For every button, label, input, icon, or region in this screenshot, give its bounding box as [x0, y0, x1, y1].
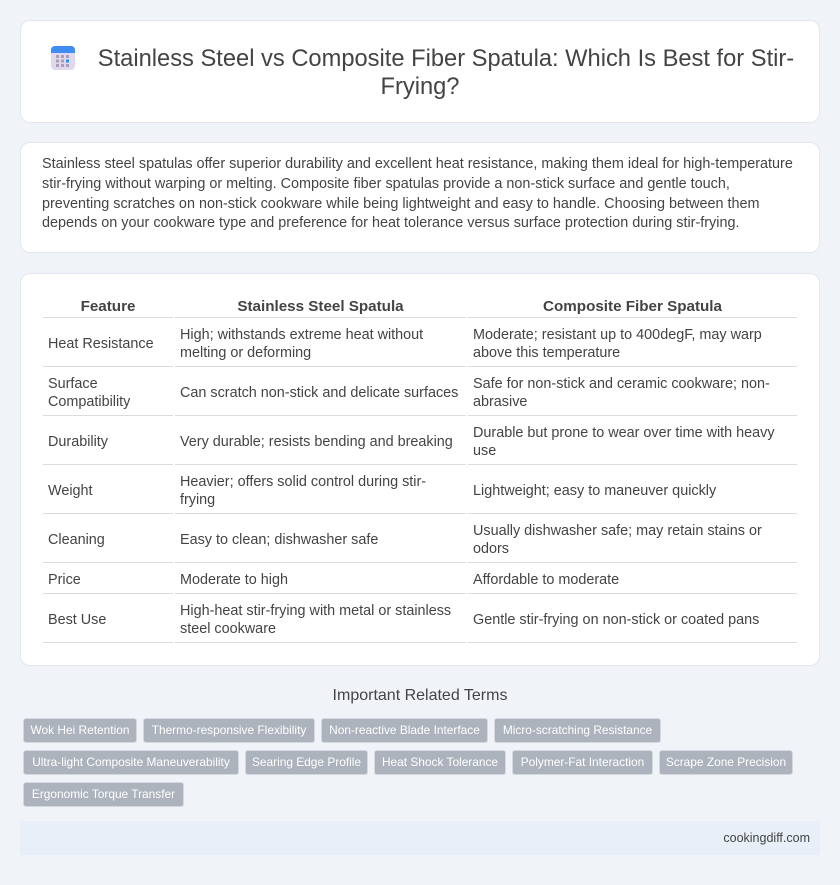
cell: High; withstands extreme heat without — [180, 327, 423, 343]
tag — [494, 718, 661, 743]
cell — [473, 327, 762, 361]
cell: Lightweight; easy to maneuver quickly — [473, 483, 716, 499]
tag — [143, 718, 315, 743]
footer bar — [20, 821, 820, 855]
cell: melting or deforming — [180, 345, 311, 361]
tag: Non-reactive Blade Interface — [329, 723, 480, 737]
text: intro: stir-frying without warping or melting. Composite fiber spatulas provide a non-stick surface and gentle touch, — [42, 176, 730, 192]
tag list — [23, 718, 793, 807]
cell: Gentle stir-frying on non-stick or coated pans — [473, 612, 759, 628]
cell: Moderate; resistant up to 400degF, may warp — [473, 327, 762, 343]
title — [98, 46, 794, 100]
tag: Ergonomic Torque Transfer — [32, 787, 175, 801]
cell — [180, 474, 426, 508]
tag — [23, 718, 137, 743]
cell: Usually dishwasher safe; may retain stains or — [473, 523, 762, 539]
table header: Stainless Steel Spatula: Stainless Steel Spatula — [237, 298, 404, 315]
row: Heat Resistance: Heat Resistance — [48, 336, 154, 352]
title: Stainless Steel vs Composite Fiber Spatula: Which Is Best for Stir- — [98, 46, 794, 72]
row: Surface Compatibility: Surface — [48, 376, 98, 392]
text: intro: Stainless steel spatulas offer superior durability and excellent heat resistance, making them ideal for high-temperature — [42, 156, 793, 172]
cell — [473, 425, 775, 459]
cell: High-heat stir-frying with metal or stainless — [180, 603, 451, 619]
tag: Scrape Zone Precision — [666, 755, 786, 769]
cell: Affordable to moderate — [473, 572, 619, 588]
panel: intro paragraph — [20, 142, 820, 253]
cell: Very durable; resists bending and breaking — [180, 434, 453, 450]
cell: above this temperature — [473, 345, 620, 361]
icon: calendar — [51, 46, 75, 70]
cell: steel cookware — [180, 621, 276, 637]
row: Cleaning: Cleaning — [48, 532, 105, 548]
text: intro: preventing scratches on non-stick cookware while being lightweight and easy to handle. Choosing between them — [42, 196, 760, 212]
cell — [473, 376, 770, 410]
tag — [659, 750, 793, 775]
cell: Durable but prone to wear over time with heavy — [473, 425, 775, 441]
heading: related terms: Important Related Terms — [333, 687, 507, 704]
cell: Can scratch non-stick and delicate surfaces — [180, 385, 458, 401]
cell: odors — [473, 541, 509, 557]
panel: title card — [20, 20, 820, 123]
cell — [180, 603, 451, 637]
tag: Ultra-light Composite Maneuverability — [32, 755, 230, 769]
panel: comparison table — [20, 273, 820, 666]
cell: use — [473, 443, 496, 459]
row: Durability: Durability — [48, 434, 108, 450]
table header: Composite Fiber Spatula: Composite Fiber Spatula — [543, 298, 722, 315]
tag: Thermo-responsive Flexibility — [152, 723, 306, 737]
tag: Heat Shock Tolerance — [382, 755, 498, 769]
text: intro — [42, 156, 793, 231]
text: intro: depends on your cookware type and preference for heat tolerance versus surface protection during stir-frying. — [42, 215, 740, 231]
cell — [180, 327, 424, 361]
tag: Polymer-Fat Interaction — [521, 755, 644, 769]
table header: Feature: Feature — [81, 298, 135, 315]
tag: Micro-scratching Resistance — [503, 723, 652, 737]
row: Surface Compatibility: Compatibility — [48, 394, 130, 410]
row: Surface Compatibility — [48, 376, 130, 410]
row: Price: Price — [48, 572, 81, 588]
tag — [321, 718, 488, 743]
tag: Searing Edge Profile — [252, 755, 361, 769]
tag — [374, 750, 506, 775]
cell: Heavier; offers solid control during stir- — [180, 474, 426, 490]
row: Best Use: Best Use — [48, 612, 106, 628]
row: Weight: Weight — [48, 483, 93, 499]
tag — [512, 750, 653, 775]
cell: abrasive — [473, 394, 527, 410]
title: Frying? — [380, 74, 460, 100]
cell: Moderate to high — [180, 572, 288, 588]
cell: frying — [180, 492, 215, 508]
tag — [23, 782, 184, 807]
tag: Wok Hei Retention — [31, 723, 129, 737]
tag — [245, 750, 368, 775]
cell: Safe for non-stick and ceramic cookware; non- — [473, 376, 770, 392]
tag — [23, 750, 239, 775]
cell: Easy to clean; dishwasher safe — [180, 532, 378, 548]
cell — [473, 523, 762, 557]
footer text: cookingdiff.com — [723, 831, 810, 845]
